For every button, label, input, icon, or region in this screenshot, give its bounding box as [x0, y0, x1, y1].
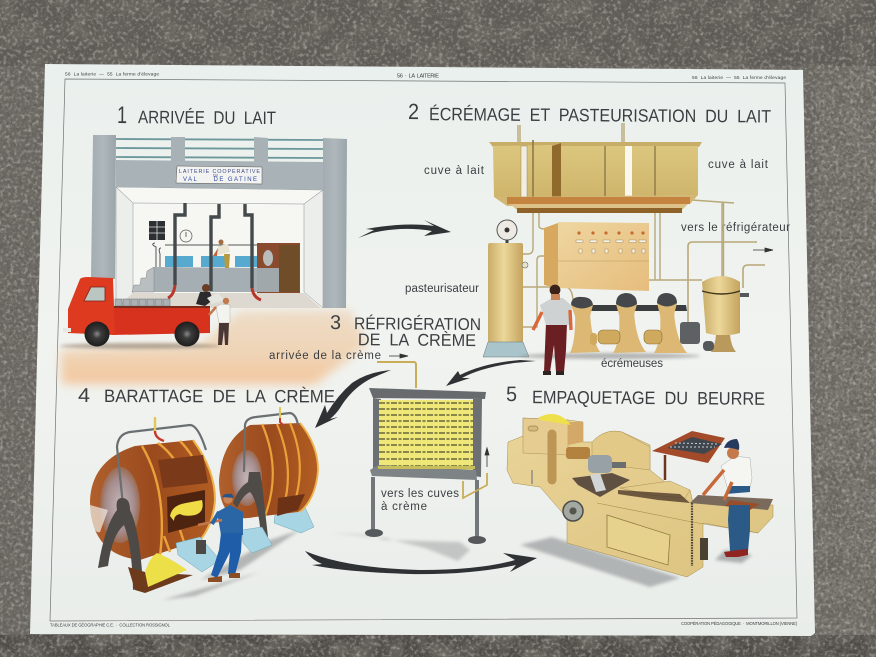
- scene 1: truck: [60, 277, 220, 349]
- delivery table: [690, 495, 773, 510]
- side walls: [116, 187, 323, 308]
- side leg: [700, 538, 708, 560]
- label: cuve à lait left: cuve à lait: [424, 165, 485, 177]
- hand wheel: [563, 501, 583, 521]
- shirt: [721, 456, 752, 490]
- arms: [533, 310, 571, 330]
- small arrow: arrivée de la crème: [389, 354, 408, 358]
- hook: [154, 417, 156, 433]
- machine body: [507, 418, 773, 577]
- hatch opening: [167, 490, 205, 533]
- scene 5: worker: [703, 439, 752, 563]
- small arrow: up, vers les cuves: [485, 448, 489, 467]
- title 3: RÉFRIGÉRATION: [354, 314, 481, 334]
- cap: [724, 439, 739, 450]
- housing: [592, 431, 650, 470]
- scene 4: churns: [90, 407, 318, 600]
- bumper: [63, 328, 71, 332]
- butter: [170, 500, 203, 521]
- churn left: [90, 417, 215, 590]
- label: vers les cuves à crème: [381, 488, 459, 513]
- tray: [370, 465, 477, 480]
- sign: LAITERIE COOPERATIVE: [179, 169, 260, 175]
- paper sheet: [30, 64, 815, 636]
- sign: VAL DE GATINE: [183, 177, 257, 183]
- platform and steps: [154, 267, 278, 292]
- legs: [728, 505, 750, 551]
- butter tray: [128, 567, 193, 593]
- hatch lid: [158, 455, 208, 488]
- motor: [703, 341, 714, 351]
- title 5: [506, 383, 765, 409]
- arrow: 3 to 4: [315, 370, 391, 428]
- feet: [365, 529, 383, 537]
- interior walls: [116, 187, 323, 308]
- head: [550, 285, 560, 295]
- blue box front: [176, 537, 220, 572]
- ceiling: [116, 187, 323, 204]
- title 4: BARATTAGE DE LA CRÈME: [104, 386, 335, 406]
- shadow: [520, 353, 700, 359]
- handle: [244, 413, 298, 472]
- support: [233, 472, 268, 537]
- label: vers les cuves à crème: à crème: [381, 501, 427, 513]
- scene 1: ground wash: [60, 310, 368, 384]
- arms: [703, 470, 732, 500]
- label: écrémeuses: écrémeuses: [601, 358, 663, 370]
- churn worker: [198, 494, 243, 582]
- blue box centre: [242, 527, 272, 553]
- label: vers les cuves à crème: vers les cuves: [381, 488, 459, 500]
- machine shadow: [520, 537, 680, 587]
- tank rim: [489, 142, 702, 147]
- head: [727, 447, 739, 459]
- support: [98, 498, 143, 590]
- inner frame: [50, 79, 797, 621]
- title 5: 5: [506, 383, 517, 406]
- back wall items: grille, clock: [149, 221, 262, 267]
- drive housings: [598, 330, 620, 344]
- pillars and beam: [91, 135, 116, 279]
- scene 2: worker: [533, 285, 572, 375]
- screw column: [691, 503, 693, 566]
- cylinder: [488, 243, 523, 343]
- header right: 56 La laiterie — 55 La ferme d'élevage: [692, 75, 786, 81]
- back room: [257, 243, 300, 293]
- title 1: 1: [117, 102, 127, 129]
- scene 5: butter packing machine: [507, 414, 773, 587]
- scene 2: pasteuriser: [483, 220, 529, 357]
- churn right: [219, 407, 318, 537]
- sign: DU: [213, 174, 219, 178]
- side slots: [548, 434, 556, 480]
- pipe tips: [168, 285, 261, 300]
- red rack: [652, 431, 725, 480]
- shadow: [330, 533, 470, 561]
- cab: [68, 277, 115, 335]
- bodies: [570, 312, 600, 353]
- title 1: [117, 102, 276, 130]
- shoes: [543, 371, 564, 375]
- title 3: DE LA CRÈME: [358, 330, 476, 350]
- title 2: [408, 99, 771, 127]
- label: arrivée de la crème: arrivée de la crème: [269, 350, 381, 362]
- base: [483, 342, 529, 357]
- tank base beams: [507, 197, 690, 204]
- shoes: [724, 549, 748, 557]
- header centre: 56 · LA LAITERIE: [397, 74, 439, 80]
- arrow: 2 to 3: [446, 360, 536, 386]
- return pipe: [463, 473, 487, 498]
- pipes: [175, 203, 252, 291]
- tank divider: [552, 143, 561, 197]
- rails: [116, 139, 323, 158]
- gears: [566, 447, 590, 459]
- scene 3: refrigerator: [330, 362, 487, 561]
- dial: [497, 220, 517, 240]
- scene 2: control panel: [544, 222, 649, 291]
- hopper: [523, 418, 568, 455]
- hook: [279, 407, 281, 418]
- worker: [213, 240, 230, 268]
- title 5: EMPAQUETAGE DU BEURRE: [532, 387, 765, 409]
- funnel underside: [494, 195, 698, 206]
- label: cuve à lait right: cuve à lait: [708, 159, 769, 171]
- floor: [116, 293, 321, 308]
- top bar: [369, 388, 486, 399]
- arrow: 4 to 5: [305, 551, 537, 574]
- footer left: TABLEAUX DE GÉOGRAPHIE C.E. · COLLECTION ROSSIGNOL: [50, 622, 171, 628]
- heads: [571, 297, 593, 314]
- scene 2: cream separators: [520, 293, 700, 359]
- tank right: [561, 146, 698, 197]
- title 2: 2: [408, 99, 419, 124]
- filter cylinder: [702, 276, 740, 336]
- title 1: ARRIVÉE DU LAIT: [138, 107, 276, 128]
- valve: [522, 262, 528, 268]
- shadow: [715, 550, 752, 563]
- scene 1: dairy building: [91, 135, 347, 308]
- chute: [572, 473, 630, 497]
- legs: [373, 477, 477, 537]
- truck shadow: [60, 343, 220, 349]
- title 4: 4: [78, 385, 90, 407]
- frame: [373, 398, 381, 472]
- floor shadows: [162, 530, 300, 600]
- label: vers le réfrigérateur: vers le réfrigérateur: [681, 222, 790, 234]
- tank left: [493, 145, 552, 197]
- table: [573, 305, 687, 311]
- scene 1: men at truck: [196, 284, 230, 345]
- arrow: 1 to 2: [358, 220, 451, 238]
- front panel: [607, 515, 670, 565]
- milk tanks: [165, 256, 260, 267]
- butter: [538, 414, 571, 425]
- blue box rear: [274, 503, 314, 533]
- scene 2: receiver tank: [680, 276, 749, 352]
- title 3: [330, 312, 481, 350]
- sign: [176, 166, 262, 184]
- small arrow: vers le réfrigérateur: [753, 248, 773, 252]
- handle: [117, 425, 206, 505]
- yellow cooling grid: [379, 400, 473, 470]
- title 2: ÉCRÉMAGE ET PASTEURISATION DU LAIT: [429, 104, 771, 127]
- legs: [544, 323, 567, 372]
- cream can: [680, 322, 700, 344]
- belt: [726, 486, 750, 494]
- lever: [531, 470, 533, 484]
- supply pipe: [377, 362, 416, 388]
- title 3: 3: [330, 312, 341, 334]
- scene 2: milk tanks and pipes: [489, 123, 765, 327]
- stand: [711, 335, 736, 352]
- label: pasteurisateur: pasteurisateur: [405, 283, 479, 295]
- level gauges: [521, 146, 527, 197]
- milk churns: [115, 299, 170, 306]
- flatbed: [112, 307, 210, 335]
- shirt: [540, 298, 572, 325]
- pipes behind: [518, 123, 765, 327]
- header left: 56 La laiterie — 55 La ferme d'élevage: [65, 72, 159, 78]
- wheels: [84, 322, 110, 346]
- cab window: [84, 287, 105, 301]
- roller: [588, 455, 612, 473]
- footer right: COOPÉRATION PÉDAGOGIQUE · MONTMORILLON (VIENNE): [681, 621, 798, 626]
